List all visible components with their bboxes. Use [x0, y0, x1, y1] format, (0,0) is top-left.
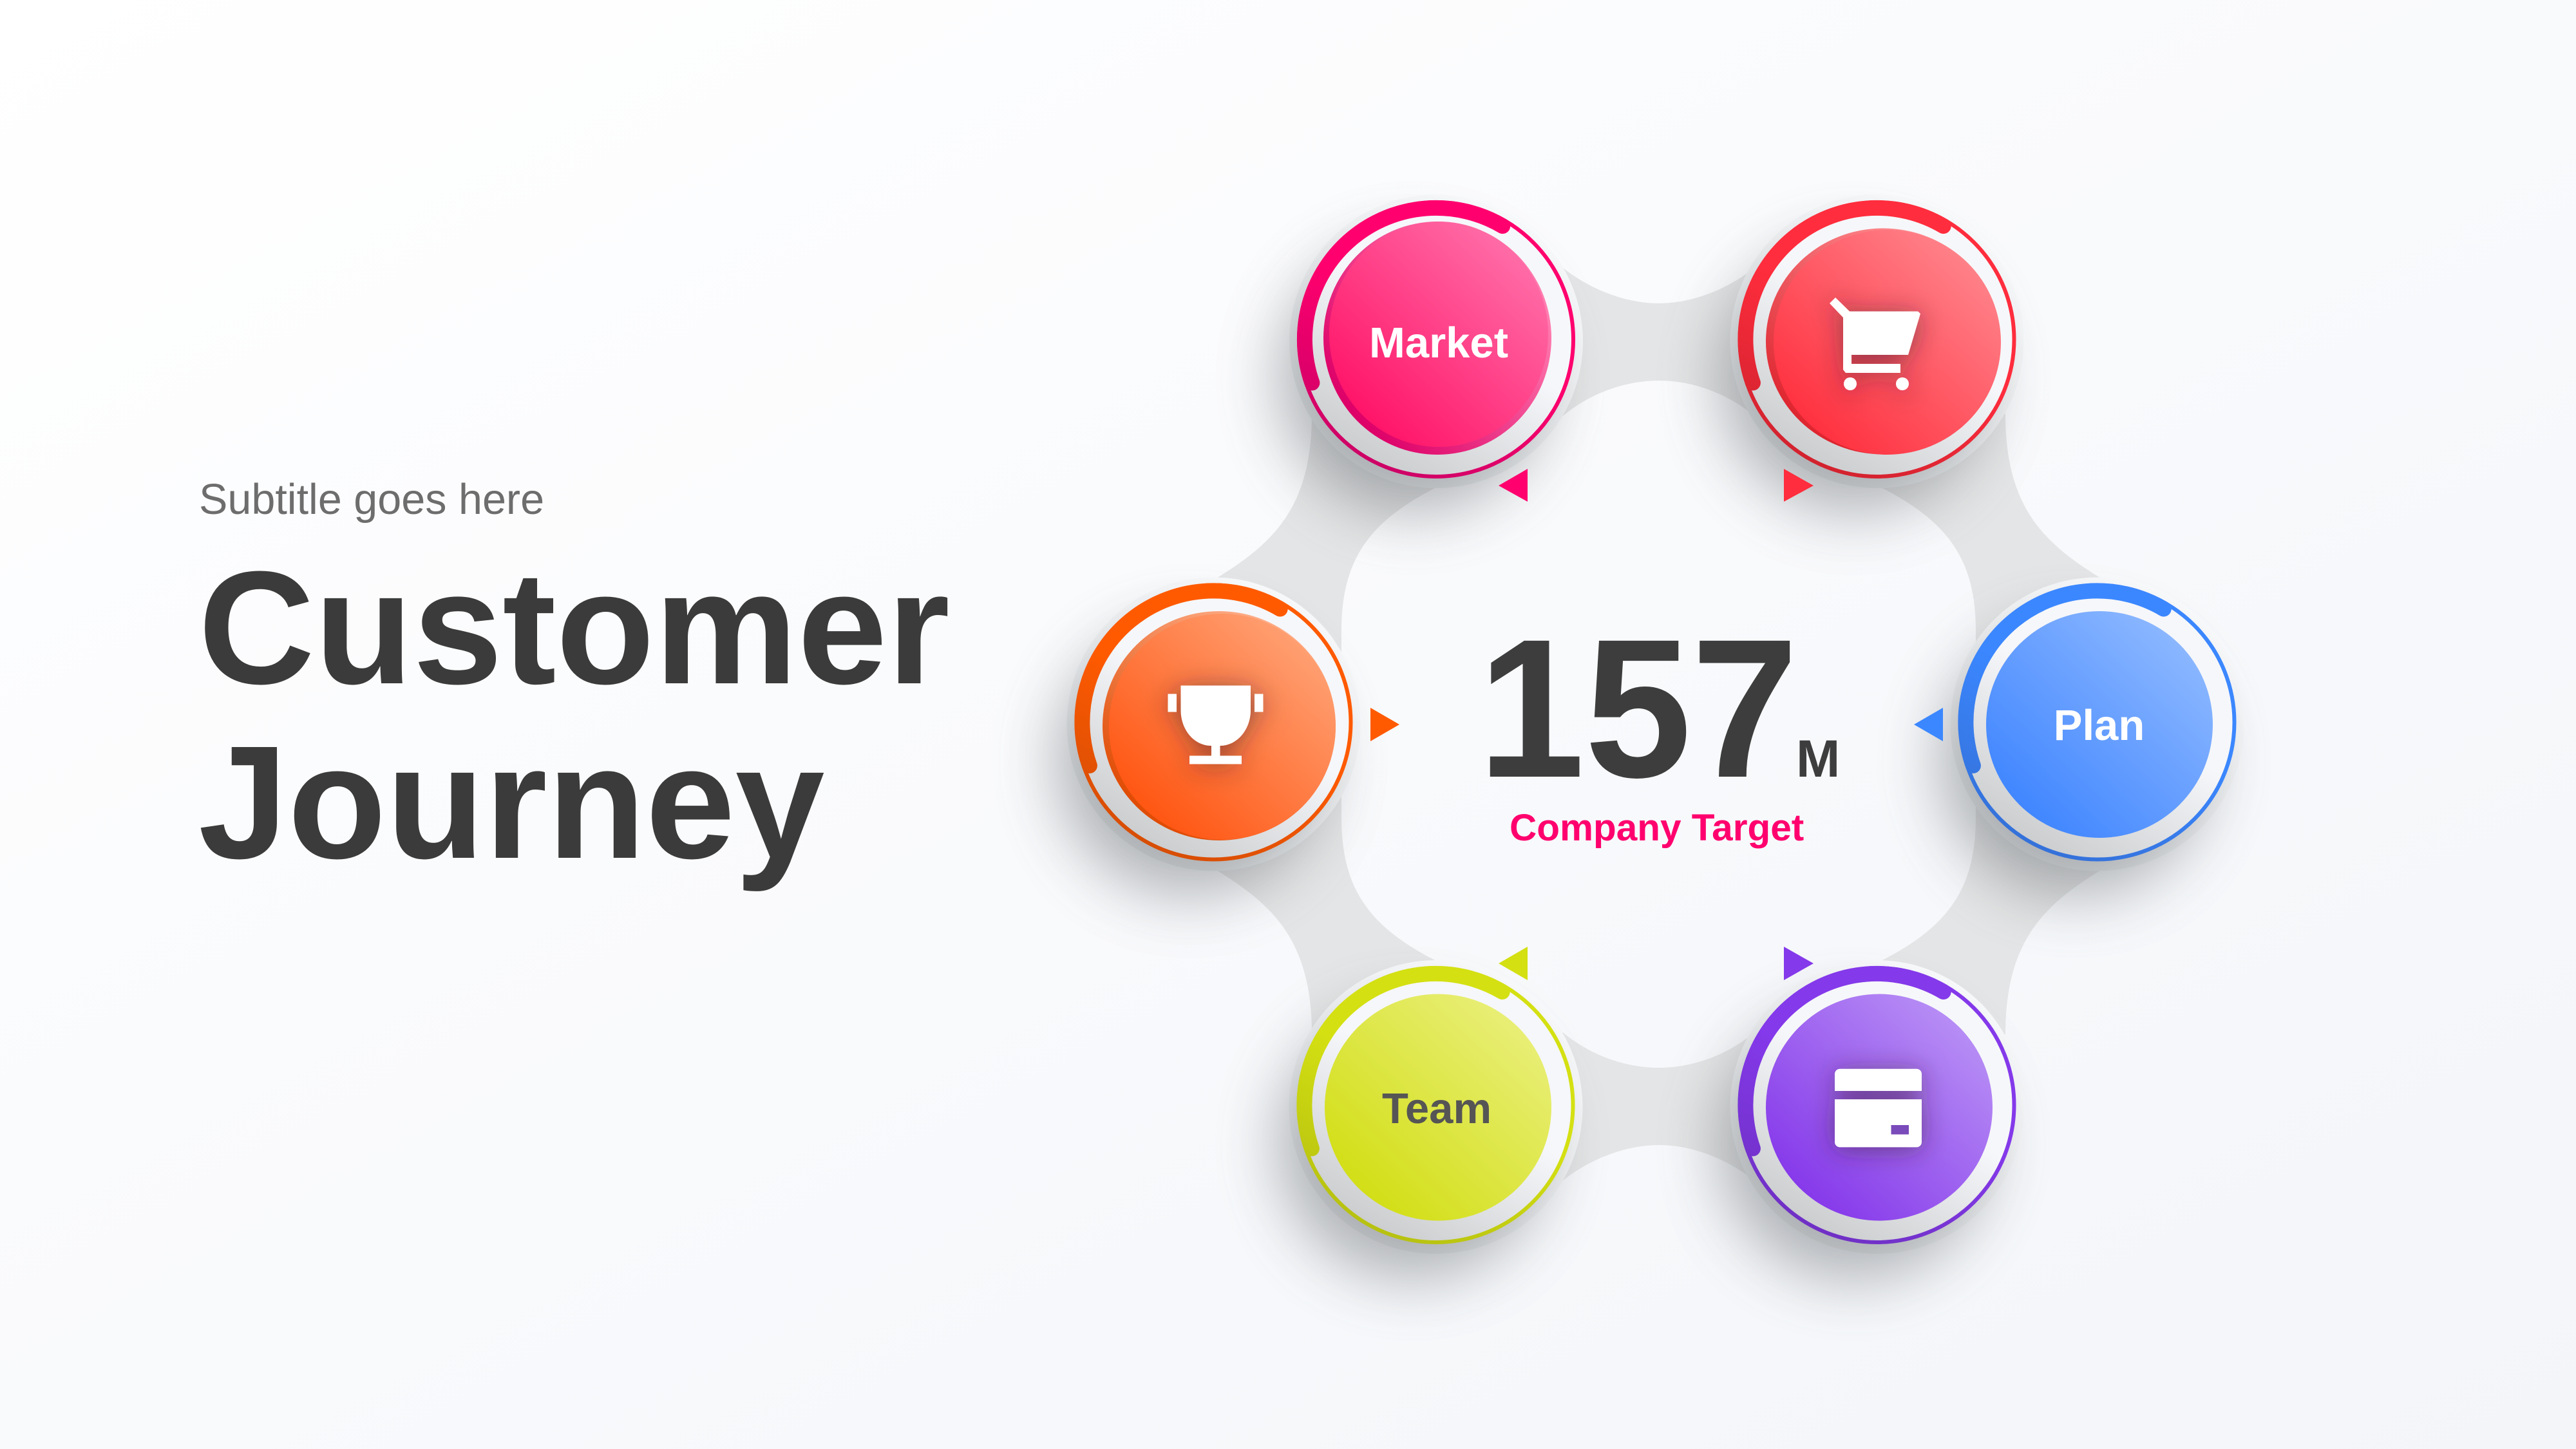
arrow: cart — [1784, 469, 1814, 502]
arrow: Team — [1499, 947, 1528, 980]
label: Plan: Plan — [2054, 701, 2145, 750]
center metric — [1478, 598, 1840, 849]
caption: Company Target: Company Target — [1510, 807, 1804, 849]
icon: trophy — [1168, 685, 1264, 764]
node: trophy — [1055, 577, 1360, 896]
node: card — [1718, 960, 2023, 1279]
arrow: Market — [1499, 469, 1528, 502]
connector band — [1215, 268, 2102, 1180]
icon: shopping cart — [1830, 298, 1920, 390]
title: Customer — [198, 538, 950, 717]
text block: heading — [198, 476, 950, 892]
node: Team — [1278, 960, 1583, 1279]
arrow: trophy — [1370, 708, 1399, 741]
unit: M: M — [1796, 730, 1840, 788]
value: 157: 157 — [1478, 598, 1798, 819]
label: Market: Market — [1369, 319, 1508, 367]
label: Team: Team — [1382, 1084, 1492, 1133]
title: Journey — [198, 712, 825, 892]
node: Market — [1278, 194, 1583, 513]
icon: credit card — [1835, 1069, 1922, 1147]
node: shopping cart — [1718, 194, 2023, 513]
arrow: card — [1784, 947, 1814, 980]
journey diagram — [1055, 194, 2244, 1279]
arrow: Plan — [1914, 708, 1943, 741]
subtitle: Subtitle goes here — [199, 476, 544, 524]
node: Plan — [1938, 577, 2244, 896]
